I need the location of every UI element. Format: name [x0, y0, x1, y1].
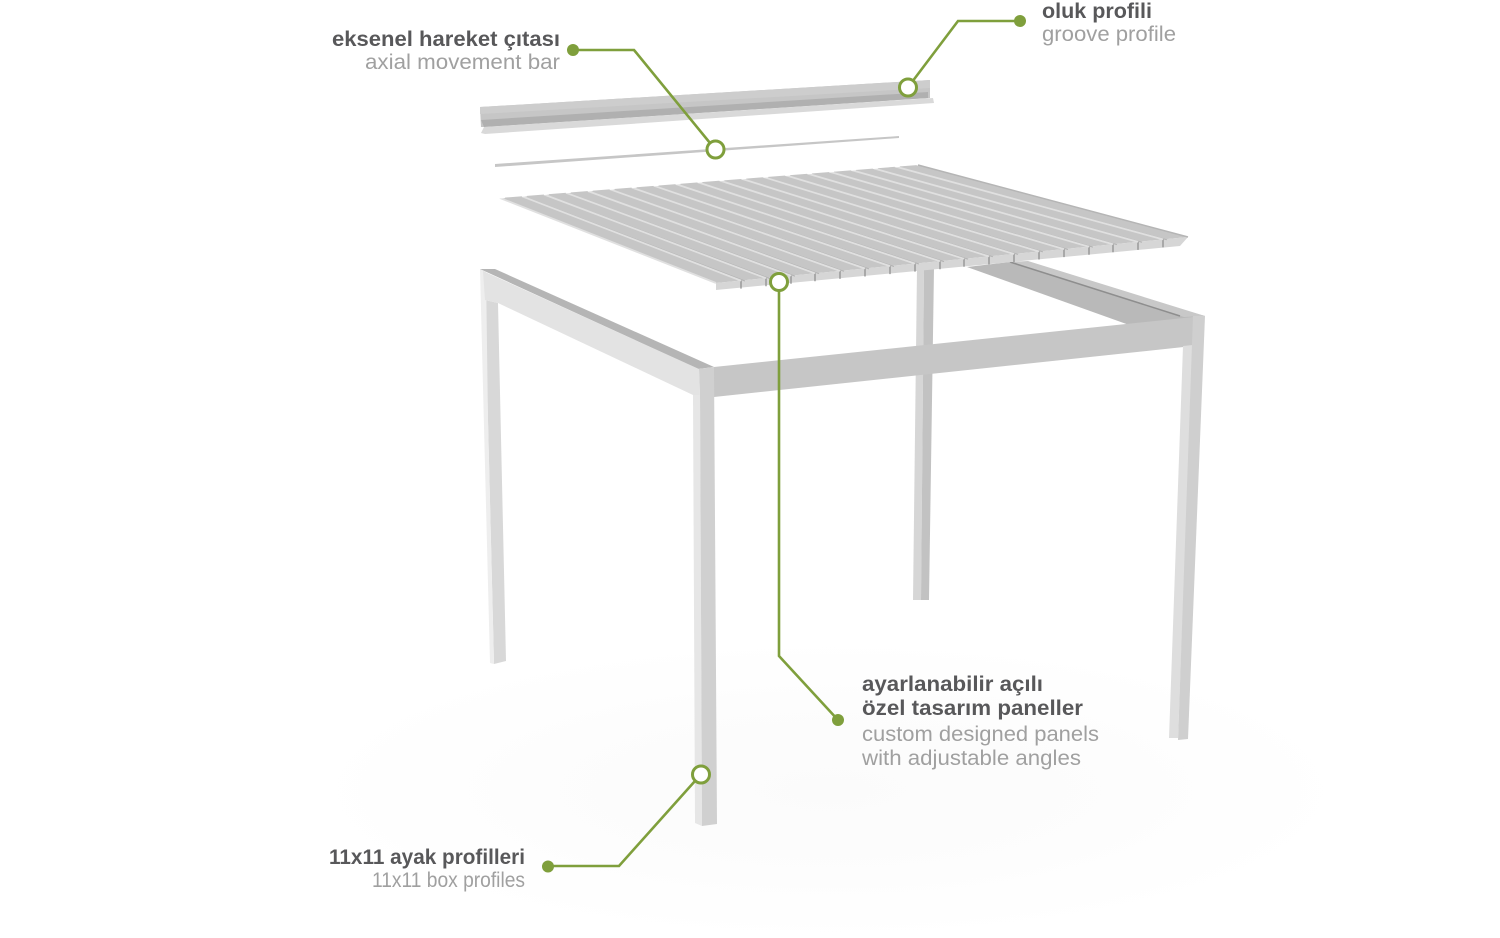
callout: custom panels: [770, 274, 1099, 770]
front edge notches: [741, 239, 1163, 289]
right corner post: [1169, 316, 1205, 740]
label: with adjustable angles: [861, 747, 1081, 770]
front edge strip: [716, 237, 1188, 290]
label: custom designed panels: [862, 723, 1099, 746]
leader line: [779, 290, 838, 720]
callout: groove profile: [900, 0, 1176, 96]
label: [332, 28, 560, 74]
end dot: [832, 714, 844, 726]
right side beam: [967, 261, 1205, 326]
label: 11x11 ayak profilleri: [329, 846, 525, 869]
leader line: [573, 50, 710, 143]
louvered roof panel: [500, 164, 1188, 290]
end dot: [1014, 15, 1026, 27]
panel surface: [500, 165, 1188, 283]
target ring: [707, 141, 724, 158]
callout: axial movement bar: [332, 28, 724, 158]
label: axial movement bar: [365, 51, 560, 74]
callout: box profiles: [329, 766, 710, 892]
target ring: [770, 274, 788, 290]
floor shadow: [310, 640, 1350, 938]
far side edge: [918, 165, 1188, 237]
label: oluk profili: [1042, 0, 1152, 23]
slat shadow lines: [526, 168, 1167, 281]
back edge notches: [500, 164, 918, 198]
end dot: [542, 860, 554, 872]
label: groove profile: [1042, 23, 1176, 46]
label: 11x11 box profiles: [372, 869, 525, 892]
left side beam: [480, 269, 714, 396]
label: [329, 846, 525, 892]
label: [1042, 0, 1176, 46]
axial movement bar: [495, 136, 899, 167]
end dot: [567, 44, 579, 56]
label: eksenel hareket çıtası: [332, 28, 560, 51]
pergola frame: [480, 261, 1205, 826]
left rear post: [480, 269, 506, 664]
leader line: [548, 781, 695, 866]
back post: [913, 268, 934, 600]
leader line: [912, 21, 1020, 82]
label: ayarlanabilir açılı: [862, 673, 1043, 696]
label: özel tasarım paneller: [862, 697, 1083, 720]
target ring: [692, 766, 710, 783]
label: [861, 673, 1099, 770]
target ring: [900, 79, 916, 96]
groove profile: [480, 80, 934, 134]
front beam: [714, 317, 1193, 397]
front corner post: [693, 367, 717, 826]
slat highlights: [500, 167, 1163, 283]
